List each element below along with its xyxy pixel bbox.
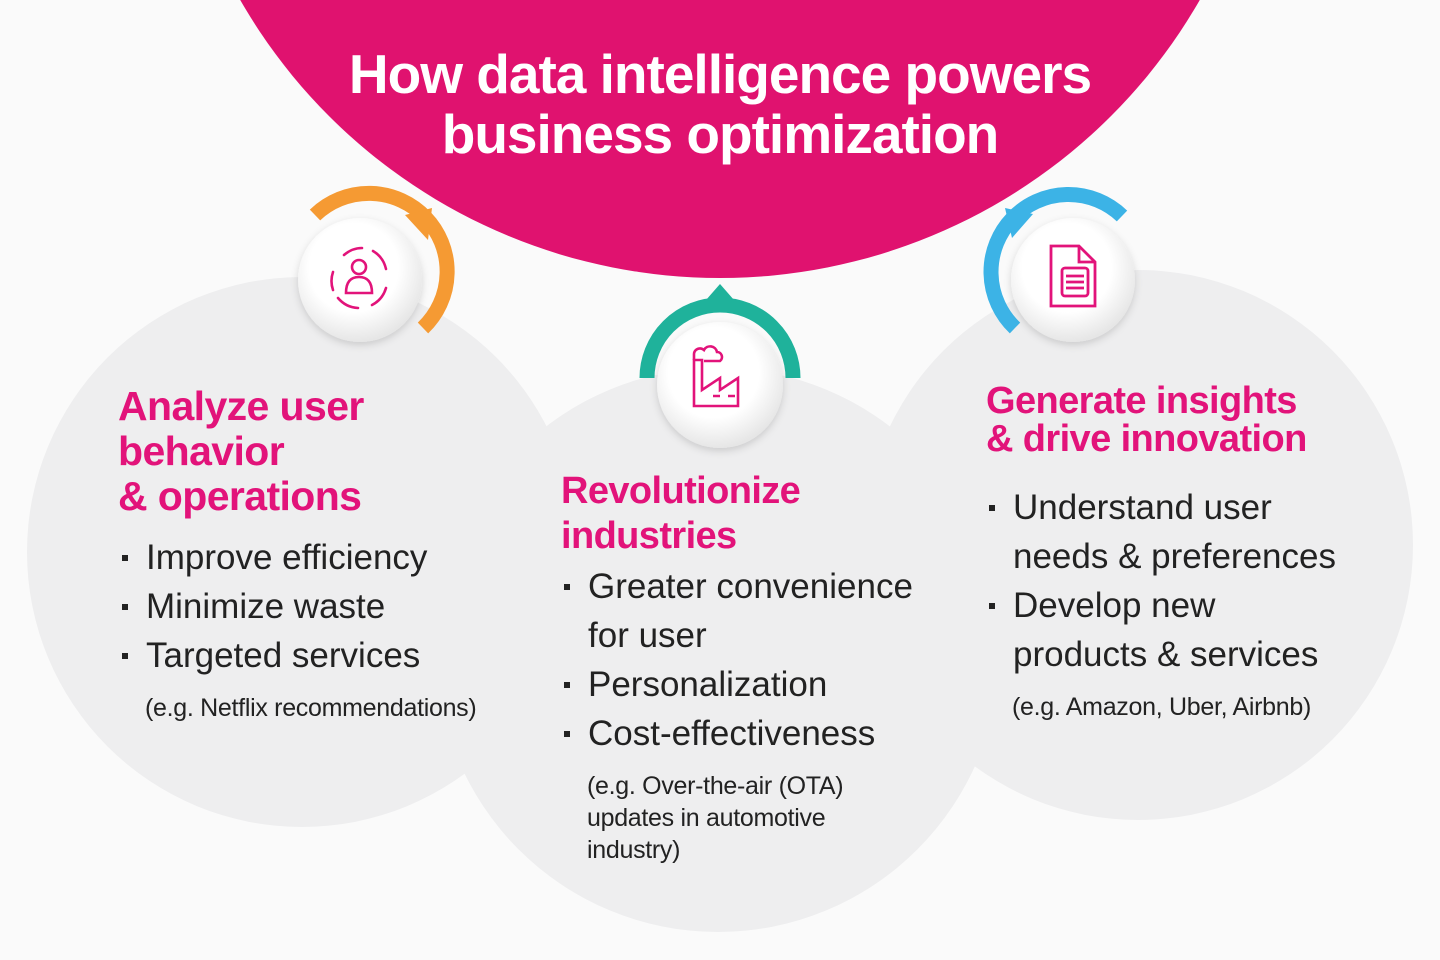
list: left: Improve efficiency <box>146 538 427 577</box>
heading: left <box>118 383 364 519</box>
icon: blue arc <box>991 195 1122 328</box>
title <box>349 43 1091 165</box>
list: middle: for user <box>588 616 707 655</box>
icon: right white circle with document <box>1011 218 1135 342</box>
heading: right: Generate insights <box>986 380 1297 422</box>
heading: middle: Revolutionize <box>561 470 800 512</box>
panel: left circle <box>27 277 577 827</box>
list: right: needs & preferences <box>1013 537 1336 576</box>
title: business optimization <box>442 103 998 165</box>
note: middle: updates in automotive <box>587 804 825 832</box>
panel: middle circle <box>436 368 1000 932</box>
heading: left: Analyze user <box>118 383 364 429</box>
list: left <box>122 538 428 675</box>
icon: middle white circle with factory <box>657 322 783 448</box>
note: middle: industry) <box>587 836 680 864</box>
list: middle: Greater convenience <box>588 567 913 606</box>
heading: right <box>986 380 1307 460</box>
heading: right: & drive innovation <box>986 418 1307 460</box>
note: middle: (e.g. Over-the-air (OTA) <box>587 772 843 800</box>
list: middle <box>564 567 913 753</box>
heading: middle <box>561 470 800 557</box>
list: left: Targeted services <box>146 636 420 675</box>
heading: left: & operations <box>118 473 361 519</box>
title circle <box>167 0 1273 278</box>
note: right: (e.g. Amazon, Uber, Airbnb) <box>1012 693 1311 721</box>
title: How data intelligence powers <box>349 43 1091 105</box>
note: left: (e.g. Netflix recommendations) <box>145 694 476 722</box>
icon: orange arc <box>315 193 447 328</box>
list: right: products & services <box>1013 635 1318 674</box>
panel: right circle <box>863 270 1413 820</box>
list: right <box>989 488 1336 674</box>
list: right: Understand user <box>1013 488 1272 527</box>
list: middle: Personalization <box>588 665 827 704</box>
list: left: Minimize waste <box>146 587 385 626</box>
icon: left white circle with people cycle <box>298 218 422 342</box>
icon: teal arc <box>647 284 793 378</box>
note: middle <box>587 772 843 864</box>
heading: middle: industries <box>561 515 737 557</box>
list: right: Develop new <box>1013 586 1215 625</box>
heading: left: behavior <box>118 428 284 474</box>
list: middle: Cost-effectiveness <box>588 714 875 753</box>
